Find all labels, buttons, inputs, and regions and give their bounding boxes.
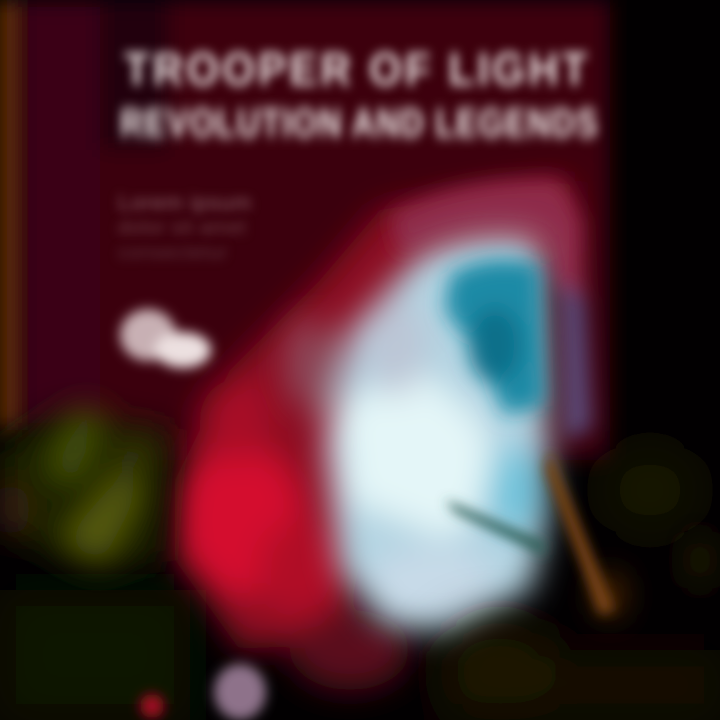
subtitle text block: dolor sit amet [118,217,246,239]
subtitle text block: consectetur [118,242,228,264]
teal head patch [445,259,545,415]
pale blue plumage [286,235,550,635]
leaf and lower blooms [140,450,615,720]
title: REVOLUTION AND LEGENDS [120,100,599,145]
foliage [0,445,720,720]
subtitle text block [115,190,254,264]
white cloud icon [120,309,211,368]
title: TROOPER OF LIGHT [124,43,591,95]
subtitle text block: Lorem ipsum [118,190,252,215]
upper crown of the bird [390,179,592,440]
title [114,43,604,147]
panel: dark red backdrop [0,0,610,460]
red bird body [175,180,570,690]
